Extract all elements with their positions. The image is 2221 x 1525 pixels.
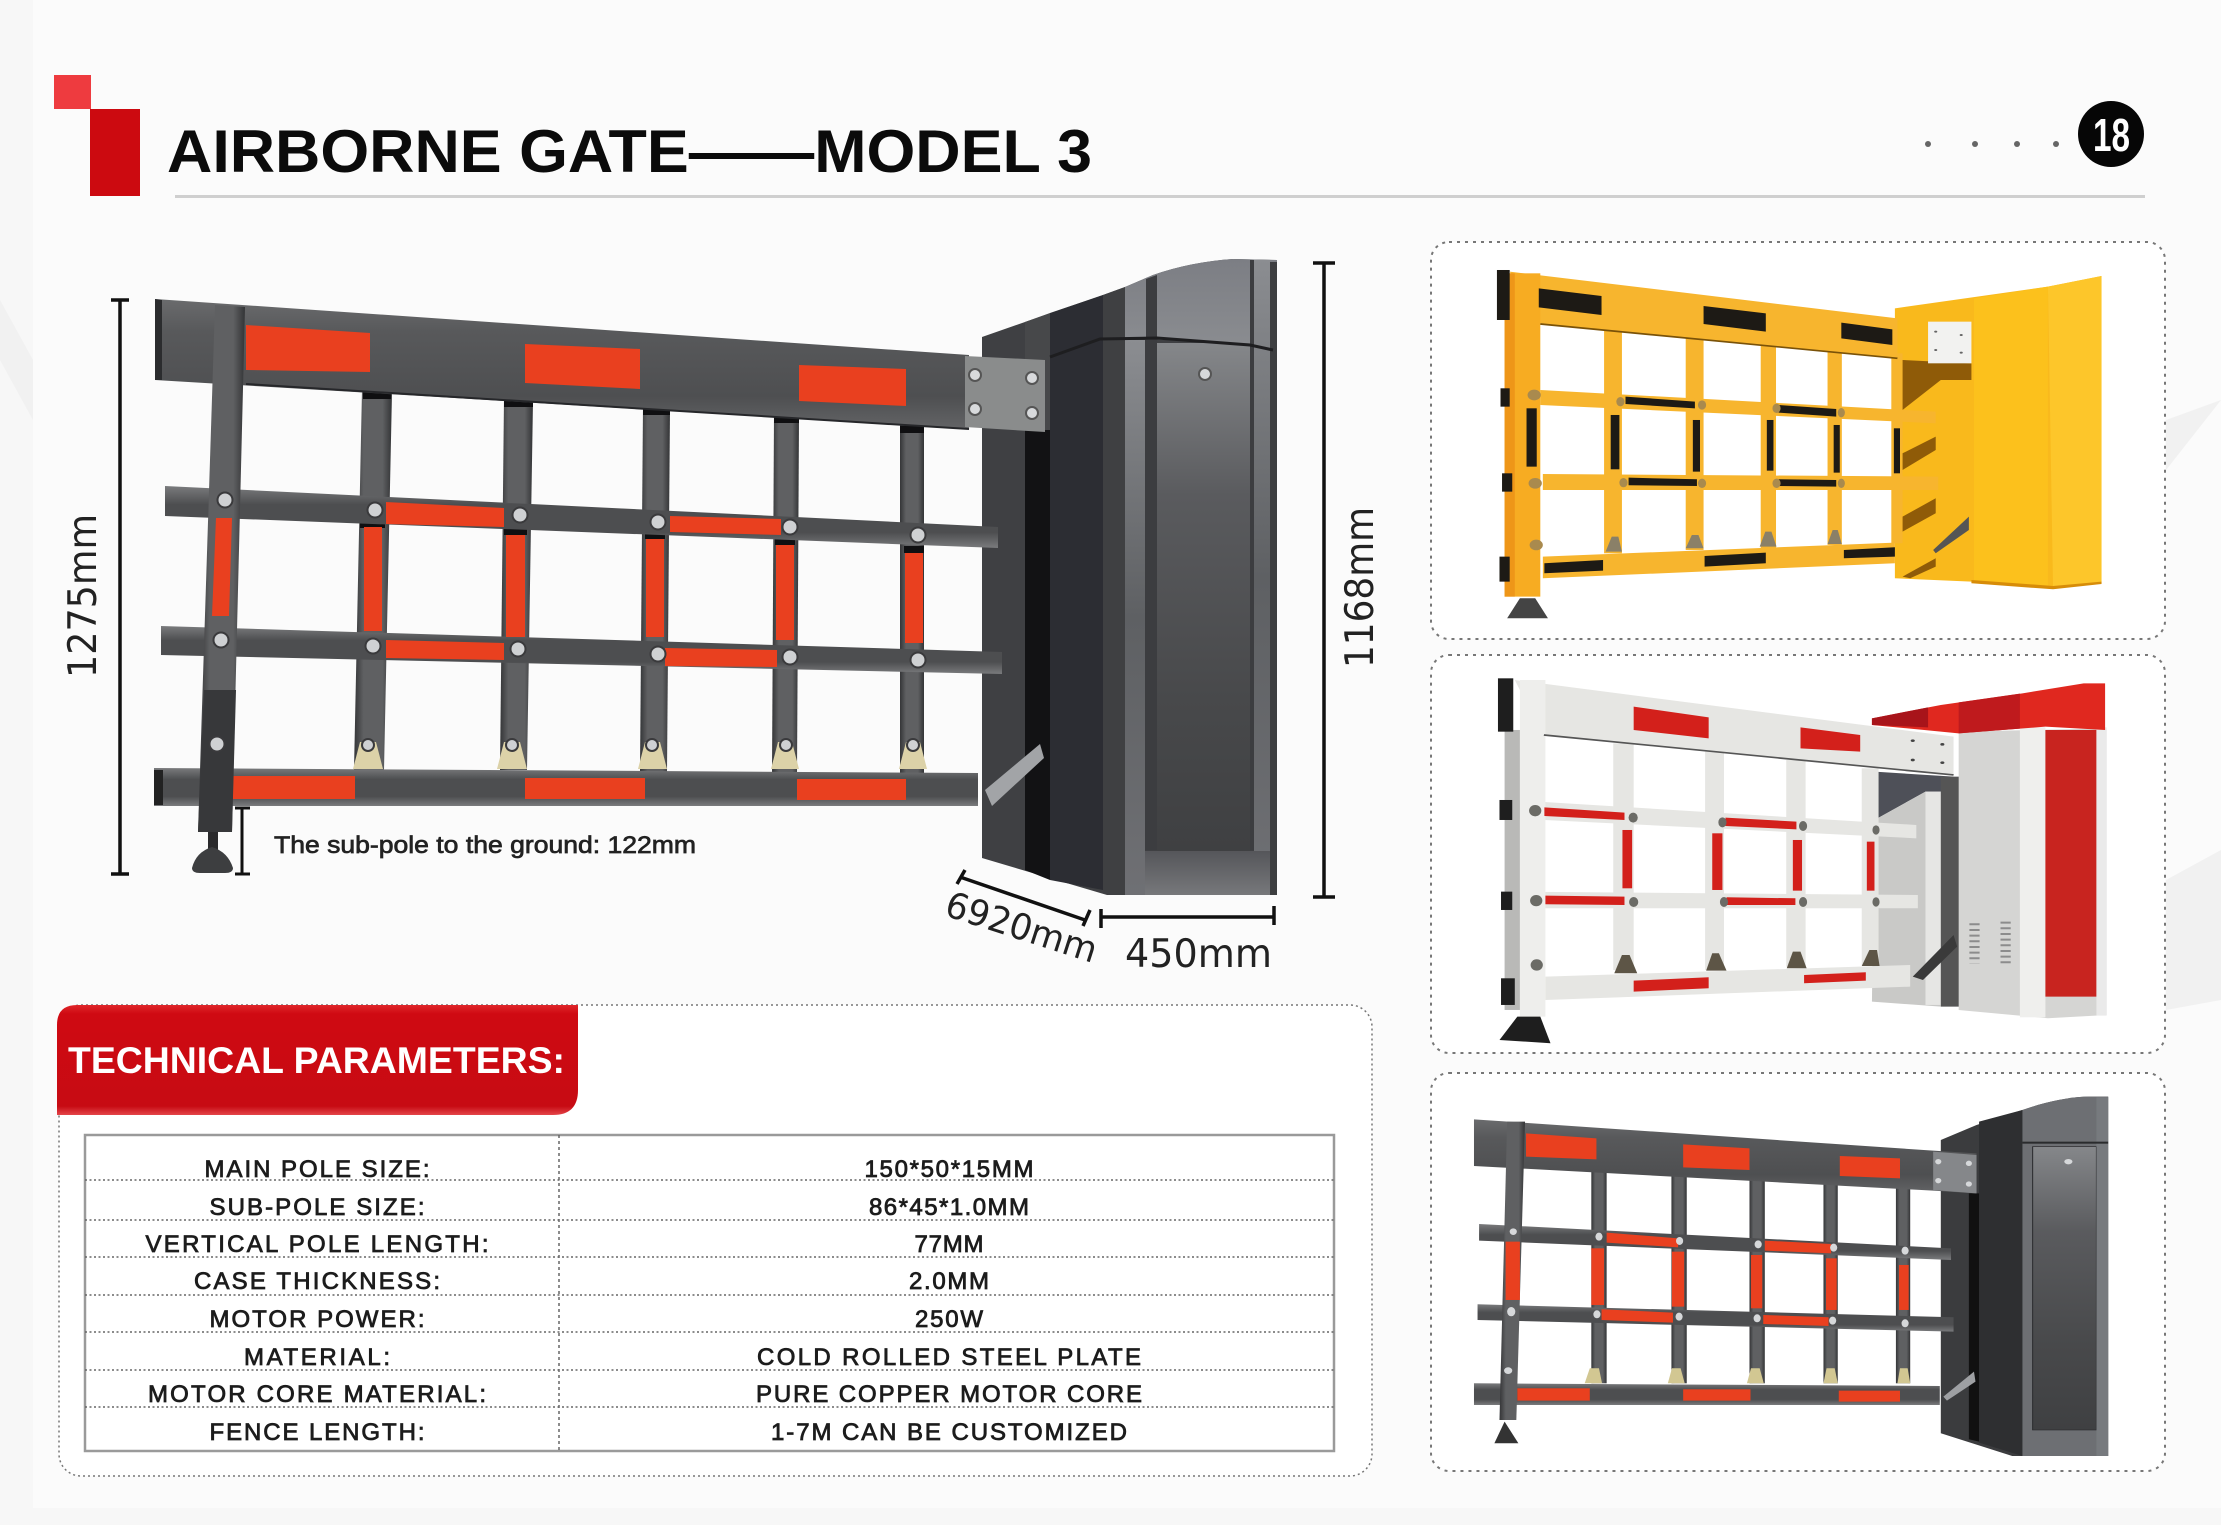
yellow gate black strips [1497,270,1900,582]
row: sub-pole size: SUB-POLE SIZE: [210,1194,424,1221]
page number badge [2078,101,2144,167]
header rule [175,195,2145,198]
header logo mark [54,75,140,196]
parameters heading: TECHNICAL PARAMETERS: [68,1040,565,1081]
card: white and red gate [1431,655,2165,1053]
white gate plate bolts [1911,739,1944,764]
main gate photo [154,259,1277,895]
dark gate arm [1943,1372,1976,1401]
dimension: sub-pole to ground: The sub-pole to the ground: 122mm [274,832,696,859]
white gate cabinet [1872,683,2107,1018]
dark gate grid [1474,1119,1977,1420]
yellow grid [1505,272,1938,597]
row: sub-pole size [210,1194,1029,1221]
parameters table [85,1135,1334,1451]
parameters tab [57,1005,578,1115]
yellow gate bolts [1528,390,1845,550]
dark gate foot [1494,1422,1518,1443]
row: material: COLD ROLLED STEEL PLATE [757,1344,1141,1371]
white gate red strips [1544,707,1874,992]
card: yellow gate [1431,242,2165,639]
row: material [244,1344,1141,1371]
white beam shadow line [1544,735,1954,775]
row: fence length [210,1419,1127,1446]
dark gate brackets [1585,1368,1910,1383]
dark gate plate [1933,1152,1977,1193]
yellow mounting plate [1928,322,1971,363]
bolts [210,492,926,752]
white gate photo [1498,678,2107,1043]
title: AIRBORNE GATE——MODEL 3 [167,118,1092,185]
dark gate cabinet [1941,1097,2108,1456]
row: motor power: MOTOR POWER: [210,1306,424,1333]
faint background swoosh [0,300,2221,1010]
row: vertical pole length: 77MM [914,1231,984,1258]
row: case thickness: CASE THICKNESS: [194,1268,440,1295]
dimension: 1168mm [1313,263,1383,897]
white gate bolts [1529,805,1880,971]
support arm [985,744,1044,806]
row: motor power [210,1306,983,1333]
left vertical pole [198,305,245,832]
bottom bar [154,768,978,806]
page indicator dots [1925,141,2059,147]
yellow gate brackets [1606,530,1842,552]
mounting plate [965,356,1045,432]
left pole lower section [198,690,236,832]
dimension: 6920mm: 6920mm [940,885,1102,972]
top beam [155,299,969,429]
row: vertical pole length: VERTICAL POLE LENGTH: [146,1231,488,1258]
row: motor power: 250W [915,1306,983,1333]
grid posts [354,390,924,775]
dimension: 450mm: 450mm [1125,932,1272,977]
row: main pole size: MAIN POLE SIZE: [204,1156,430,1183]
dimension: 450mm [1101,906,1274,977]
cabinet [982,259,1277,895]
horizontal bar 3 [161,626,1002,674]
dimension: sub-pole to ground [235,808,696,874]
dark gate bolts [1504,1228,1909,1374]
row: motor core material: MOTOR CORE MATERIAL: [148,1381,486,1408]
beam end cap [155,299,162,380]
panel: technical parameters [57,1005,1372,1476]
row: case thickness: 2.0MM [909,1268,989,1295]
horizontal bar 2 [165,486,998,548]
row: main pole size: 150*50*15MM [864,1156,1034,1183]
pole foot [192,832,233,873]
bottom bar end cap [154,770,163,805]
row: material: MATERIAL: [244,1344,390,1371]
row: fence length: FENCE LENGTH: [210,1419,424,1446]
yellow cabinet [1895,276,2102,589]
card: dark grey gate [1431,1073,2165,1471]
dark gate red strips [1506,1133,1909,1402]
row: sub-pole size: 86*45*1.0MM [869,1194,1029,1221]
post black caps [360,392,924,553]
white gate grid [1505,680,1954,1017]
row: motor core material: PURE COPPER MOTOR CORE [756,1381,1142,1408]
row: motor core material [148,1381,1142,1408]
white gate brackets [1614,950,1880,973]
dimension: 1168mm: 1168mm [1338,507,1383,668]
bracket feet [353,742,927,769]
dimension: 1275mm [61,300,129,874]
row: case thickness [194,1268,989,1295]
row: main pole size [204,1156,1034,1183]
beam lower shadow line [246,384,969,429]
yellow gate foot [1507,598,1548,618]
yellow gate photo [1497,270,2102,618]
reflective strips [232,325,923,800]
yellow gate beam shadow [1540,324,1897,358]
row: vertical pole length [146,1231,984,1258]
page number badge: 18 [2093,109,2130,161]
dimension: 1275mm: 1275mm [61,514,106,678]
dark gate photo [1474,1097,2108,1456]
row: fence length: 1-7M CAN BE CUSTOMIZED [771,1419,1127,1446]
left pole reflective strip [212,518,232,616]
white gate black details [1498,678,1551,1043]
